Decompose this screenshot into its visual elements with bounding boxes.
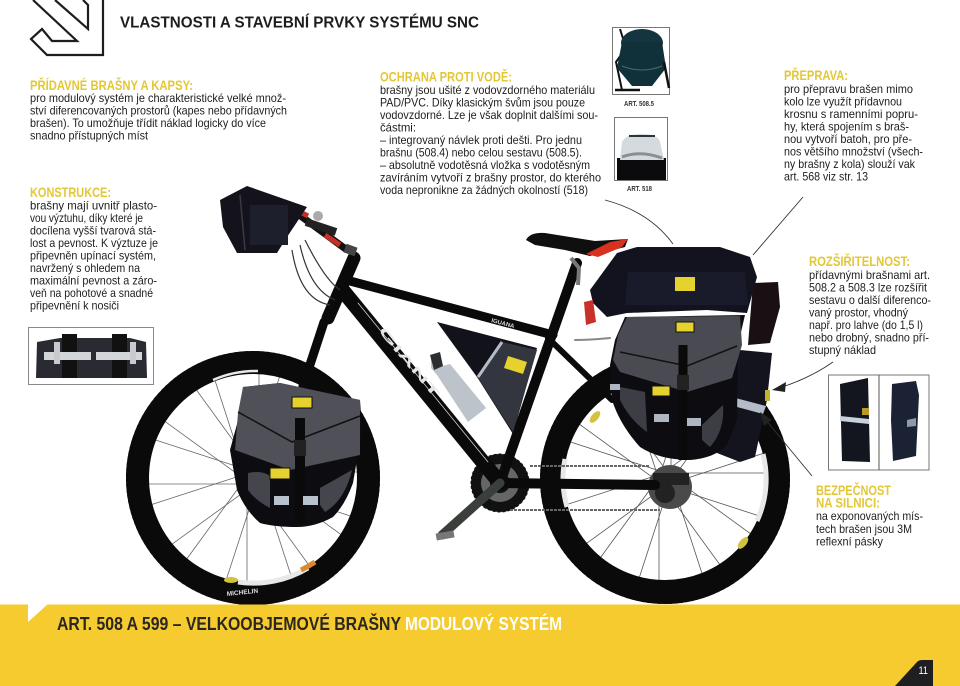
text block: přeprava: art. 568 viz str. 13 — [784, 170, 868, 184]
arrow: to reflective band from bezpečnost — [760, 412, 812, 476]
notch — [28, 604, 48, 622]
caption: art. 508.5: ART. 508.5 — [624, 101, 654, 108]
rear side bottle bag — [717, 350, 772, 462]
frame — [303, 258, 655, 485]
text block: konstrukce: vou výztuhu, díky které je — [30, 211, 143, 225]
text block: ochrana proti vodě: brašny jsou ušité z vodovzdorného materiálu — [380, 83, 595, 97]
heading: bezpečnost na silnici — [816, 481, 891, 510]
icon: section arrow logo — [31, 0, 103, 55]
text block: konstrukce: brašny mají uvnitř plasto- — [30, 198, 157, 212]
text block: konstrukce — [30, 198, 158, 312]
text block: konstrukce: veň na pohotové a snadné — [30, 286, 153, 300]
text block: přeprava: kolo lze využít přídavnou — [784, 94, 902, 108]
footer subtitle: MODULOVÝ SYSTÉM — [405, 613, 562, 634]
frame triangle bag — [437, 322, 537, 434]
photo: bag mounting system — [28, 328, 154, 384]
photo: rain cover art. 508.5 — [612, 28, 670, 94]
text block: ochrana proti vodě: vodovzdorné. Lze je však doplnit dalšími sou- — [380, 108, 598, 122]
front wheel — [128, 352, 378, 604]
saddle — [526, 233, 628, 285]
front pannier — [230, 383, 362, 527]
photo: waterproof liner art. 518 — [614, 118, 668, 180]
text block: přeprava: krosnu s ramenními popru- — [784, 107, 918, 121]
text block: přídavné brašny: pro modulový systém je charakteristické velké množ- — [30, 91, 286, 105]
heading: přídavné brašny: PŘÍDAVNÉ BRAŠNY A KAPSY: — [30, 76, 193, 93]
heading: ochrana proti vodě: OCHRANA PROTI VODĚ: — [380, 68, 512, 84]
title: VLASTNOSTI A STAVEBNÍ PRVKY SYSTÉMU SNC — [120, 12, 479, 32]
text block: ochrana proti vodě: brašnu (508.4) nebo celou sestavu (508.5). — [380, 146, 582, 160]
front wheel: MICHELIN — [226, 588, 259, 598]
text block: rozšiřitelnost — [809, 268, 931, 357]
chainring — [471, 454, 660, 512]
rear top bag — [590, 247, 780, 345]
arrow: to top bag from ochrana proti vodě — [605, 200, 673, 244]
arrow: to bottle bag from rozšiřitelnost — [772, 362, 833, 392]
text block: ochrana proti vodě: částmi: — [380, 120, 416, 134]
text block: konstrukce: navržený s ohledem na — [30, 261, 140, 275]
text block: bezpečnost na silnici: reflexní pásky — [816, 534, 883, 548]
handlebar bag — [220, 186, 307, 253]
red rear light — [584, 300, 596, 325]
text block: přídavné brašny: brašen). To umožňuje třídit náklad logicky do více — [30, 116, 266, 130]
text block: rozšiřitelnost: např. pro lahve (do 1,5 l) — [809, 318, 923, 332]
photo: bottle bags — [828, 375, 929, 470]
photo: bicycle with bags: IGUANA — [490, 318, 516, 330]
text block: rozšiřitelnost: přídavnými brašnami art. — [809, 268, 930, 282]
page number badge — [895, 660, 933, 686]
text block: přídavné brašny — [30, 91, 287, 142]
panel: přeprava — [784, 66, 923, 184]
text block: rozšiřitelnost: stupný náklad — [809, 343, 876, 357]
text block: konstrukce: docílena vyšší tvarová stá- — [30, 224, 156, 238]
text block: ochrana proti vodě: – absolutně vodotěsná vložka s vodotěsným — [380, 158, 590, 172]
text block: bezpečnost na silnici: na exponovaných mís- — [816, 509, 923, 523]
text block: přeprava: nou vytvoří batoh, pro pře- — [784, 132, 912, 146]
page number badge: 11 — [918, 665, 928, 677]
crank arm and pedal — [436, 483, 500, 541]
heading: bezpečnost na silnici: BEZPEČNOST — [816, 481, 891, 498]
text block: rozšiřitelnost: 508.2 a 508.3 lze rozšířit — [809, 280, 928, 294]
text block: přídavné brašny: ství diferencovaných prostorů (kapes nebo přídavných — [30, 104, 287, 118]
text block: konstrukce: lost a pevnost. K výztuze je — [30, 236, 158, 250]
text block: rozšiřitelnost: nebo drobný, snadno pří- — [809, 330, 929, 344]
panel: konstrukce — [28, 184, 158, 384]
caption: art. 518: ART. 518 — [627, 186, 652, 193]
panel: rozšiřitelnost — [809, 252, 931, 357]
heading: přeprava: PŘEPRAVA: — [784, 66, 848, 83]
text block: ochrana proti vodě: voda nepronikne za žádných okolností (518) — [380, 183, 588, 197]
panel: bezpečnost na silnici — [816, 481, 923, 548]
text block: rozšiřitelnost: vaný prostor, vhodný — [809, 306, 908, 320]
rear pannier — [610, 315, 745, 460]
heading: konstrukce: KONSTRUKCE: — [30, 184, 111, 200]
text block: bezpečnost na silnici — [816, 509, 923, 548]
panel: ochrana proti vodě — [380, 68, 601, 197]
text block: přeprava — [784, 82, 923, 184]
text block: přeprava: pro přepravu brašen mimo — [784, 82, 913, 96]
heading: rozšiřitelnost: ROZŠIŘITELNOST: — [809, 252, 910, 269]
footer title: ART. 508 A 599 – VELKOOBJEMOVÉ BRAŠNY — [57, 613, 401, 634]
text block: ochrana proti vodě: PAD/PVC. Díky klasickým švům jsou pouze — [380, 96, 585, 110]
photo: bicycle with bags — [128, 186, 788, 604]
text block: přeprava: nos většího množství (všech- — [784, 144, 923, 158]
text block: konstrukce: připevněn upínací systém, — [30, 248, 156, 262]
text block: přeprava: hy, která spojením s braš- — [784, 120, 909, 134]
text block: ochrana proti vodě: – integrovaný návlek proti dešti. Pro jednu — [380, 133, 582, 147]
heading: bezpečnost na silnici: NA SILNICI: — [816, 494, 880, 510]
water bottle — [430, 352, 486, 422]
text block: ochrana proti vodě: zavíráním vytvoří z brašny prostor, do kterého — [380, 170, 601, 184]
text block: přeprava: ny brašny z kola) slouží vak — [784, 157, 916, 171]
text block: bezpečnost na silnici: tech brašen jsou 3M — [816, 522, 912, 536]
text block: konstrukce: maximální pevnost a záro- — [30, 274, 157, 288]
text block: konstrukce: připevnění k nosiči — [30, 298, 119, 312]
panel: přídavné brašny a kapsy — [30, 76, 287, 142]
text block: rozšiřitelnost: sestavu o další diferenco- — [809, 293, 931, 307]
frame brand lettering: GIANT — [376, 325, 442, 401]
text block: ochrana proti vodě — [380, 83, 601, 197]
rear wheel — [542, 356, 788, 602]
handlebar — [283, 203, 356, 305]
text block: přídavné brašny: snadno přístupných míst — [30, 128, 149, 142]
arrow: to top bag from přeprava — [753, 197, 803, 255]
footer band — [0, 604, 960, 686]
